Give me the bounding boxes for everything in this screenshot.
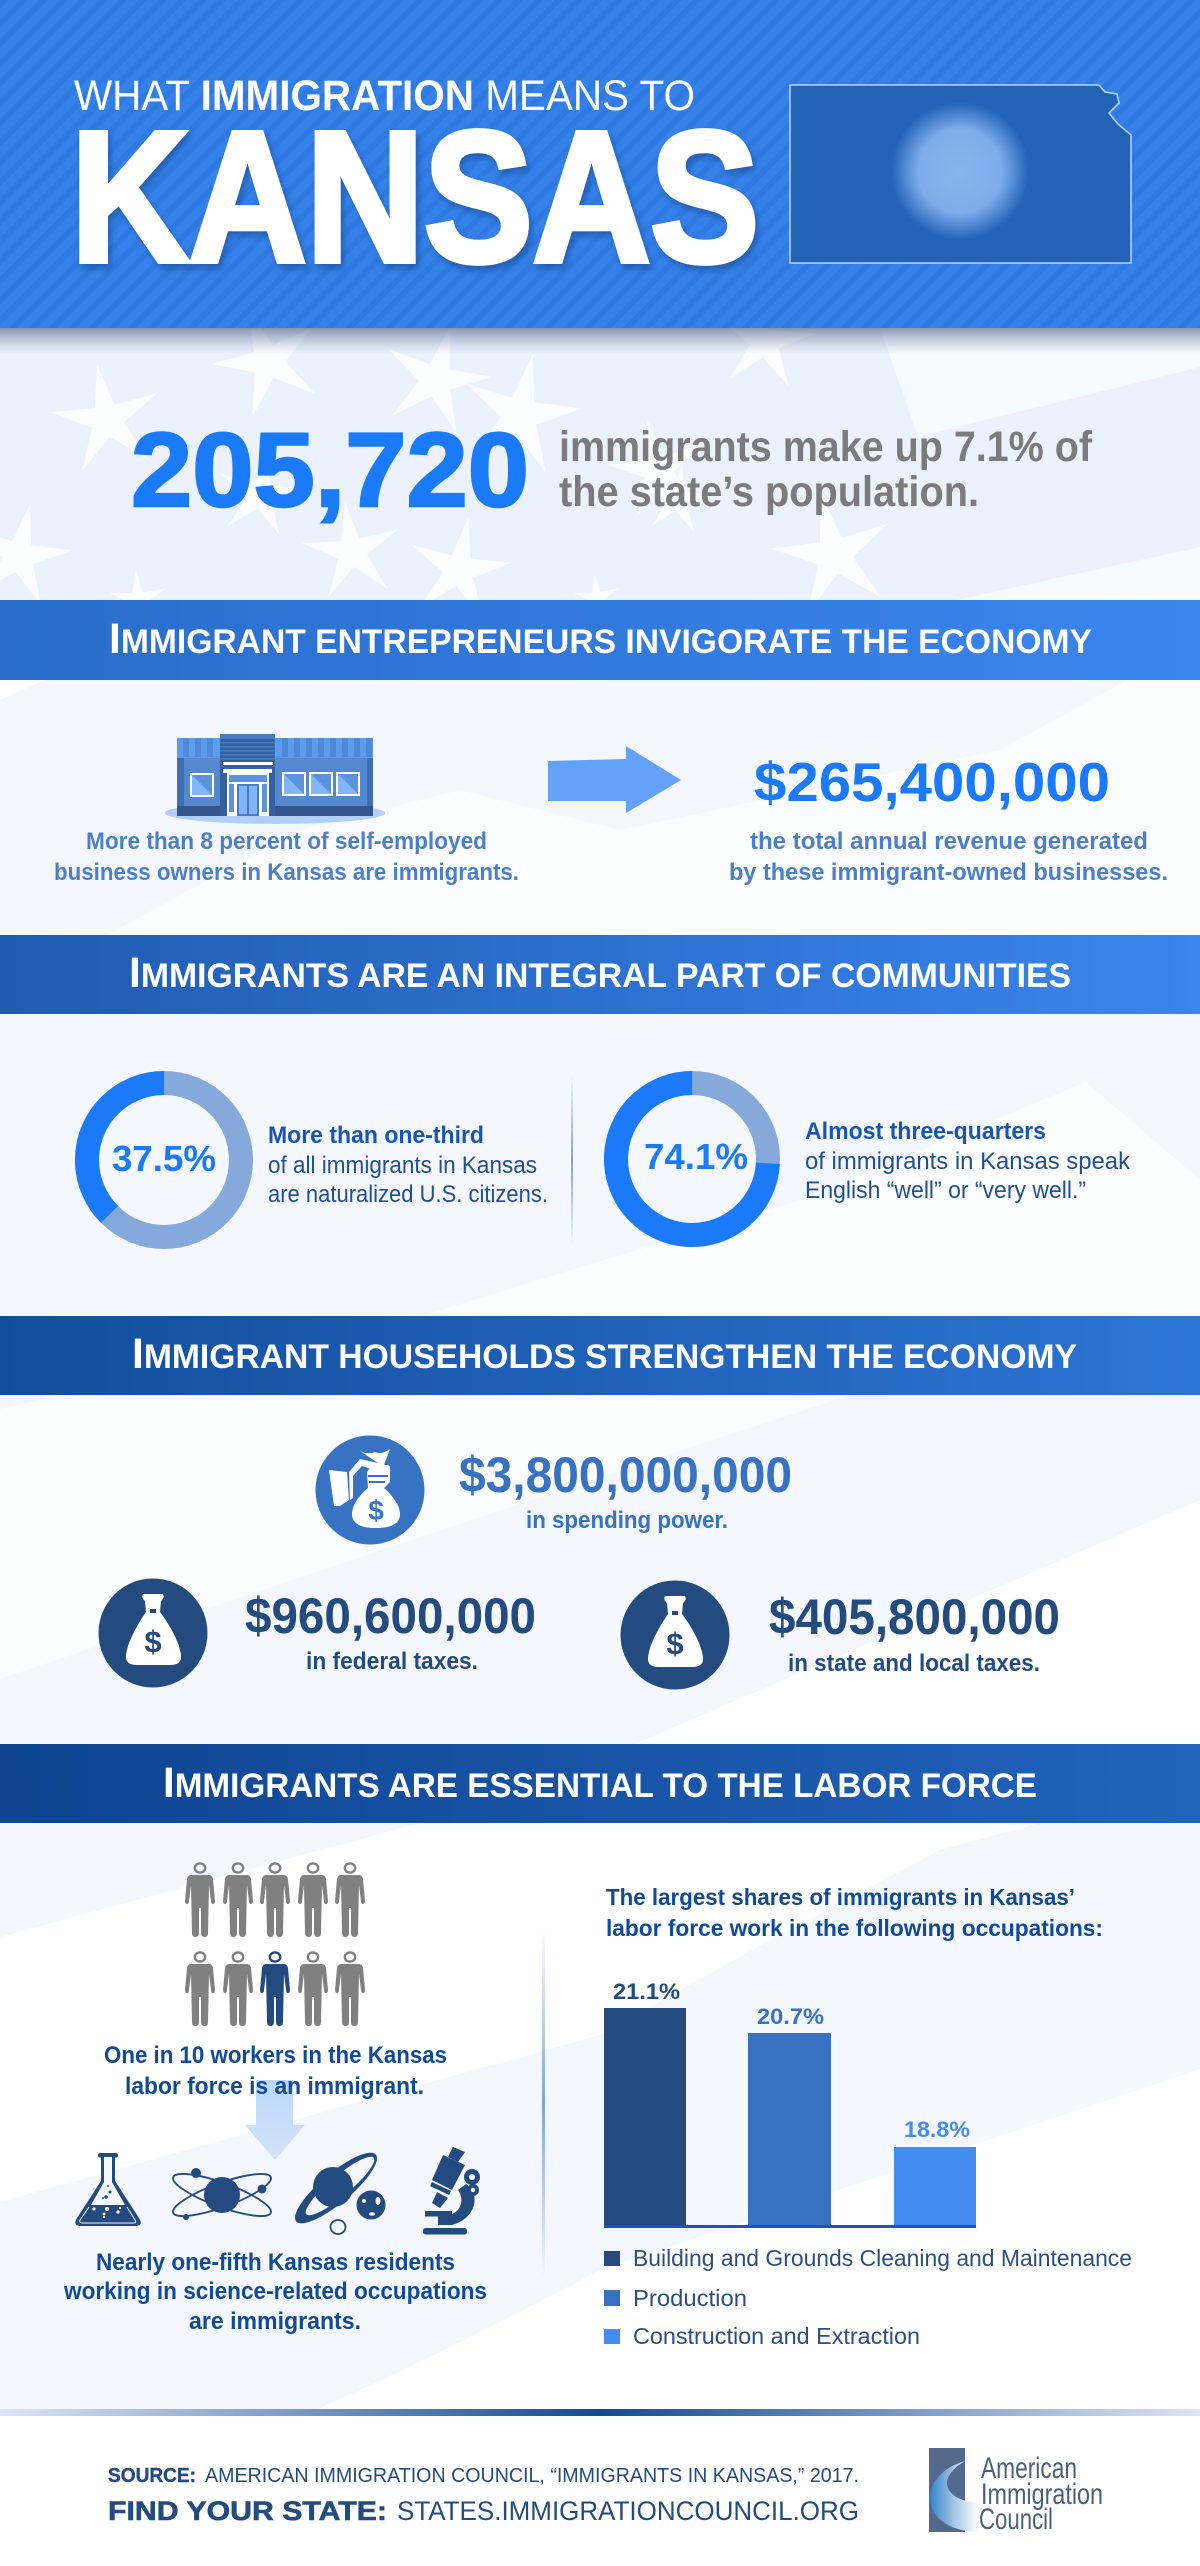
- icon: microscope: [423, 2147, 480, 2234]
- map: Kansas state shape: [790, 85, 1131, 263]
- caption: science occupations: are immigrants.: [189, 2308, 361, 2335]
- chart legend: Building and Grounds Cleaning and Maintenance: [633, 2245, 1132, 2271]
- source line: SOURCE:: [108, 2465, 196, 2487]
- heading: what immigration means to: WHAT IMMIGRATION MEANS TO: [74, 72, 695, 120]
- text: naturalized citizens: More than one-third: [268, 1122, 484, 1149]
- icon: federal tax money bag: [98, 1578, 208, 1688]
- section band: communities: [0, 935, 1200, 1014]
- caption: revenue: the total annual revenue generated: [750, 828, 1148, 855]
- footer: [0, 2409, 1200, 2566]
- find your state line: FIND YOUR STATE:: [108, 2496, 387, 2526]
- bar chart: 20.7%: [757, 2004, 824, 2029]
- figure: state and local taxes: $405,800,000: [769, 1589, 1060, 1645]
- title: Kansas: KANSAS: [71, 94, 759, 301]
- icon: state tax money bag: $: [666, 1626, 684, 1661]
- icon: hand holding money bag: $: [368, 1495, 384, 1526]
- section band: communities: IMMIGRANTS ARE AN INTEGRAL PART OF COMMUNITIES: [129, 949, 1071, 997]
- caption: federal taxes: in federal taxes.: [306, 1648, 478, 1675]
- caption: spending power: in spending power.: [526, 1507, 728, 1534]
- donut chart: 74.1%: [612, 1079, 772, 1239]
- bar chart: 18.8%: [904, 2117, 970, 2142]
- text: naturalized citizens: are naturalized U.S. citizens.: [268, 1181, 548, 1208]
- donut chart: 74.1%: 74.1%: [644, 1136, 748, 1177]
- icon: flask: [75, 2153, 141, 2226]
- caption: science occupations: [63, 2249, 487, 2335]
- chart legend: Construction and Extraction: [633, 2323, 920, 2349]
- panel: communities: [55, 1051, 1131, 1269]
- caption: self-employed owners: business owners in Kansas are immigrants.: [54, 859, 519, 886]
- logo: American Immigration Council: [929, 2448, 1103, 2536]
- caption: self-employed owners: [54, 828, 519, 886]
- revenue figure: $265,400,000: [754, 751, 1110, 813]
- icon: state tax money bag: [620, 1580, 730, 1690]
- text: English proficiency: [805, 1118, 1131, 1204]
- icon: atom: [169, 2166, 275, 2224]
- text: naturalized citizens: of all immigrants in Kansas: [268, 1152, 537, 1179]
- stars background panel: [0, 285, 1200, 626]
- bar chart: [604, 1979, 976, 2228]
- section band: labor force: IMMIGRANTS ARE ESSENTIAL TO THE LABOR FORCE: [163, 1759, 1037, 1807]
- bar chart: 21.1%: [613, 1979, 680, 2004]
- caption: one in ten: [104, 2042, 447, 2100]
- arrow: down: [245, 2080, 305, 2160]
- chart legend: Production: [633, 2285, 747, 2311]
- population caption: [559, 423, 1093, 516]
- caption: state and local taxes: in state and local taxes.: [788, 1650, 1040, 1677]
- icon: hand holding money bag: [316, 1436, 424, 1544]
- caption: revenue: [729, 828, 1168, 886]
- icon: storefront: [165, 734, 385, 824]
- logo: American Immigration Council: Council: [979, 2503, 1053, 2536]
- caption: science occupations: working in science-related occupations: [63, 2278, 487, 2305]
- chart legend: [604, 2245, 1132, 2349]
- panel: labor force left: [63, 1863, 487, 2335]
- caption: one in ten: labor force is an immigrant.: [125, 2073, 424, 2100]
- population statistic: [131, 412, 1093, 529]
- arrow: right: [548, 746, 681, 813]
- find your state line: STATES.IMMIGRATIONCOUNCIL.ORG: [397, 2496, 859, 2526]
- chart heading: [606, 1884, 1103, 1941]
- text: English proficiency: Almost three-quarters: [805, 1118, 1046, 1145]
- icon: federal tax money bag: $: [144, 1624, 162, 1659]
- caption: science occupations: Nearly one-fifth Kansas residents: [96, 2249, 455, 2276]
- source line: AMERICAN IMMIGRATION COUNCIL, “IMMIGRANTS IN KANSAS,” 2017.: [205, 2465, 859, 2487]
- background swooshes: [0, 640, 1200, 2409]
- caption: self-employed owners: More than 8 percent of self-employed: [86, 828, 487, 855]
- pictogram: one in ten workers: [185, 1863, 365, 2026]
- chart heading: The largest shares of immigrants in Kansas’: [606, 1884, 1075, 1910]
- text: English proficiency: of immigrants in Kansas speak: [805, 1148, 1131, 1175]
- population caption: the state’s population.: [559, 468, 979, 516]
- big number: 205,720: [131, 412, 529, 529]
- population caption: immigrants make up 7.1% of: [559, 423, 1093, 471]
- chart heading: labor force work in the following occupations:: [606, 1915, 1103, 1941]
- text: English proficiency: English “well” or “very well.”: [805, 1177, 1086, 1204]
- find your state line: [108, 2496, 859, 2526]
- logo: American Immigration Council: Immigration: [981, 2478, 1103, 2511]
- figure: federal taxes: $960,600,000: [245, 1588, 536, 1644]
- section band: labor force: [0, 1744, 1200, 1823]
- logo: American Immigration Council: American: [981, 2452, 1077, 2485]
- icon: planets: [287, 2143, 386, 2234]
- panel: entrepreneurs: [54, 734, 1168, 886]
- figure: spending power: $3,800,000,000: [459, 1447, 792, 1503]
- panel: households: [98, 1436, 1060, 1690]
- donut chart: 37.5%: 37.5%: [112, 1138, 216, 1179]
- donut chart: 37.5%: [55, 1051, 273, 1269]
- section band: entrepreneurs: IMMIGRANT ENTREPRENEURS INVIGORATE THE ECONOMY: [109, 615, 1092, 663]
- section band: households: [0, 1316, 1200, 1395]
- section band: entrepreneurs: [0, 600, 1200, 680]
- panel: occupations chart: [604, 1884, 1132, 2349]
- text: naturalized citizens: [268, 1122, 548, 1208]
- section band: households: IMMIGRANT HOUSEHOLDS STRENGTHEN THE ECONOMY: [132, 1330, 1077, 1378]
- header banner: [0, 0, 1200, 354]
- caption: revenue: by these immigrant-owned businesses.: [729, 859, 1168, 886]
- caption: one in ten: One in 10 workers in the Kansas: [104, 2042, 447, 2069]
